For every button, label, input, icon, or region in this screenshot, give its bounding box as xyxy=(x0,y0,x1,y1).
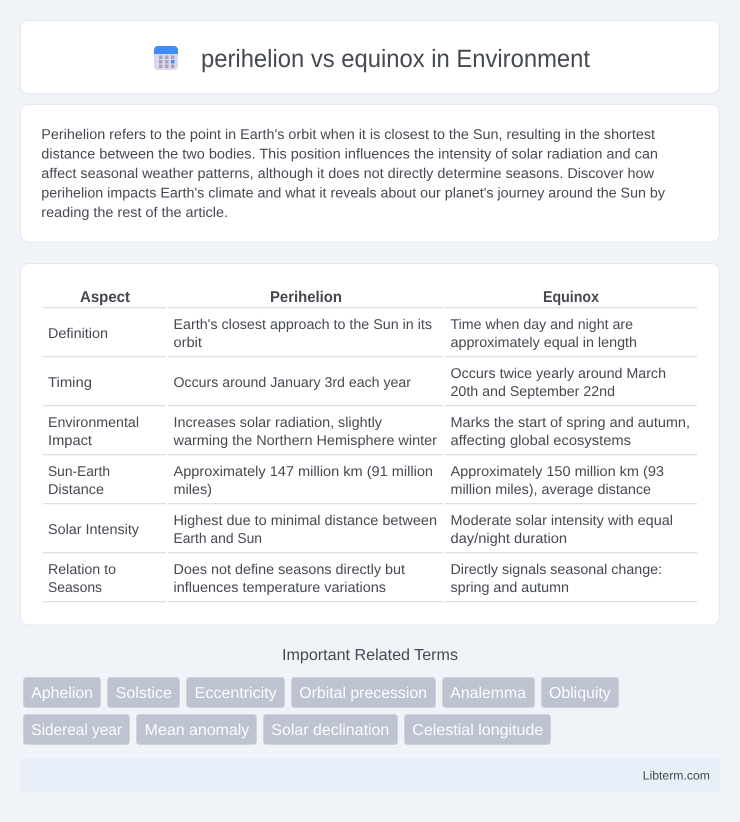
tag: Analemma xyxy=(442,678,534,708)
table row: definition: orbit xyxy=(174,335,202,351)
table row: relation to seasons: Relation to xyxy=(48,562,116,578)
heading: important related terms: Important Related Terms xyxy=(282,647,458,664)
tag: Obliquity: Obliquity xyxy=(549,685,611,702)
table row: solar intensity: Highest due to minimal distance between xyxy=(174,513,437,529)
table row: solar intensity: Solar Intensity xyxy=(48,522,140,538)
table row: relation to seasons: influences temperature variations xyxy=(174,580,386,596)
tag: Solar declination: Solar declination xyxy=(271,722,389,739)
tag: Solstice xyxy=(108,678,180,708)
table row: timing: 20th and September 22nd xyxy=(450,384,615,400)
table row: sun-earth distance: Approximately 147 million km (91 million xyxy=(174,464,433,480)
table row: sun-earth distance: miles) xyxy=(174,482,212,498)
table row: definition: Time when day and night are xyxy=(450,317,633,333)
table row: relation to seasons: Directly signals seasonal change: xyxy=(450,562,662,578)
table row: timing: Occurs around January 3rd each year xyxy=(174,375,411,391)
footer xyxy=(20,758,720,792)
table row: solar intensity: Earth and Sun xyxy=(174,531,262,547)
text block: introduction: affect seasonal weather patterns, although it does not directly determine seasons. Discover how xyxy=(41,166,655,182)
table row: relation to seasons: Seasons xyxy=(48,580,102,596)
tag: Eccentricity xyxy=(186,678,284,708)
table row: relation to seasons: spring and autumn xyxy=(450,580,569,596)
table row: timing: Occurs twice yearly around March xyxy=(450,366,666,382)
table row: environmental impact: affecting global ecosystems xyxy=(450,433,631,449)
tag: Celestial longitude xyxy=(404,714,550,744)
table row: environmental impact: Marks the start of spring and autumn, xyxy=(450,415,690,431)
table row: definition: Definition xyxy=(48,326,108,342)
table header: Aspect xyxy=(80,289,130,306)
tag: Sidereal year: Sidereal year xyxy=(31,722,122,739)
tag: Mean anomaly xyxy=(136,714,256,744)
tag: Sidereal year xyxy=(24,714,130,744)
table row: environmental impact: Increases solar radiation, slightly xyxy=(174,415,383,431)
tag: Solar declination xyxy=(264,714,398,744)
footer: Libterm.com xyxy=(643,768,710,782)
table row: timing xyxy=(48,366,666,400)
table row: definition: Earth's closest approach to the Sun in its xyxy=(174,317,432,333)
table row: environmental impact xyxy=(48,415,690,449)
table row: sun-earth distance: Sun-Earth xyxy=(48,464,110,480)
table row: sun-earth distance xyxy=(48,464,664,498)
table row: solar intensity xyxy=(48,513,673,547)
text block: introduction: Perihelion refers to the point in Earth's orbit when it is closest to the Sun, resulting in the shortest xyxy=(41,127,655,143)
panel: comparison table xyxy=(20,264,720,625)
panel: introduction xyxy=(20,104,720,242)
title: perihelion vs equinox in Environment xyxy=(201,45,590,73)
table row: relation to seasons: Does not define seasons directly but xyxy=(174,562,405,578)
tag: Eccentricity: Eccentricity xyxy=(195,685,277,702)
tag: Orbital precession: Orbital precession xyxy=(299,685,427,702)
text block: introduction: perihelion impacts Earth's climate and what it reveals about our planet's journey around the Sun by xyxy=(41,186,666,202)
tag: Orbital precession xyxy=(292,678,436,708)
icon: calendar xyxy=(154,46,178,70)
text block: introduction: distance between the two bodies. This position influences the intensity of solar radiation and can xyxy=(41,146,658,162)
table header: Equinox xyxy=(543,289,599,306)
table row: sun-earth distance: Distance xyxy=(48,482,104,498)
text block: introduction xyxy=(41,127,666,221)
tag: Obliquity xyxy=(542,678,618,708)
tag: Solstice: Solstice xyxy=(116,685,172,702)
tag: Mean anomaly: Mean anomaly xyxy=(145,722,249,739)
panel: title card xyxy=(20,20,720,94)
tag: Celestial longitude: Celestial longitude xyxy=(412,722,544,739)
table row: timing: Timing xyxy=(48,375,92,391)
table row: relation to seasons xyxy=(48,562,662,596)
table header xyxy=(80,289,599,306)
tag: Analemma: Analemma xyxy=(450,685,526,702)
table row: sun-earth distance: Approximately 150 million km (93 xyxy=(450,464,664,480)
table row: environmental impact: Environmental xyxy=(48,415,139,431)
table row: environmental impact: warming the Northern Hemisphere winter xyxy=(172,433,437,449)
tag: Aphelion: Aphelion xyxy=(31,685,93,702)
table row: definition: approximately equal in length xyxy=(450,335,637,351)
table row: sun-earth distance: million miles), average distance xyxy=(450,482,651,498)
table row: solar intensity: day/night duration xyxy=(450,531,567,547)
table row: environmental impact: Impact xyxy=(48,433,92,449)
tag: Aphelion xyxy=(24,678,100,708)
table row: definition xyxy=(48,317,637,351)
table header: Perihelion xyxy=(270,289,342,306)
table row: solar intensity: Moderate solar intensity with equal xyxy=(450,513,673,529)
related term tags xyxy=(24,678,618,744)
text block: introduction: reading the rest of the article. xyxy=(41,205,228,221)
